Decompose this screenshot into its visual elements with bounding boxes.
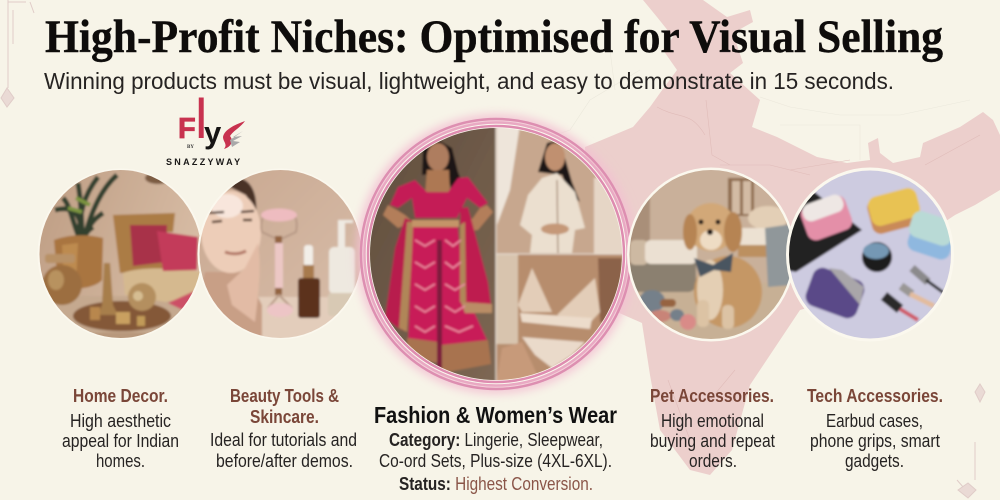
- logo: Fly by Snazzyway: [166, 87, 245, 167]
- label block: fashion and women's wear: [374, 402, 617, 494]
- label block: home decor: appeal for Indian: [62, 431, 179, 451]
- label block: home decor: homes.: [96, 451, 145, 471]
- ring glow: [362, 120, 630, 388]
- photo circle: beauty tools and skincare: [198, 170, 360, 338]
- label block: tech accessories: gadgets.: [845, 451, 904, 471]
- top right panel: satin sleepwear: [496, 125, 626, 255]
- photo circle: pet accessories: [625, 165, 800, 345]
- logo: Fly by Snazzyway: y: [204, 115, 222, 150]
- logo: Fly by Snazzyway: BY: [187, 145, 194, 150]
- logo: Fly by Snazzyway: SNAZZYWAY: [166, 157, 242, 167]
- label block: pet accessories: buying and repeat: [650, 431, 775, 451]
- highlighted photo circle: fashion and women's wear: [361, 119, 631, 389]
- label block: beauty tools and skincare: before/after demos.: [216, 451, 353, 471]
- label block: beauty tools and skincare: Skincare.: [250, 407, 319, 427]
- logo wing: [223, 121, 245, 149]
- label block: tech accessories: Earbud cases,: [826, 411, 923, 431]
- subtitle: Winning products must be visual, lightweight, and easy to demonstrate in 15 seconds.: [44, 68, 894, 94]
- pink ring: [361, 119, 631, 389]
- label block: home decor: High aesthetic: [70, 411, 171, 431]
- logo: Fly by Snazzyway: F: [178, 113, 196, 145]
- label block: tech accessories: Tech Accessories.: [807, 386, 943, 406]
- label block: beauty tools and skincare: [210, 386, 357, 471]
- label block: fashion and women's wear: Status: Highest Conversion.: [399, 474, 593, 494]
- photo circle: tech accessories: [786, 168, 951, 338]
- title: High-Profit Niches: Optimised for Visual Selling: [45, 11, 943, 63]
- photo circle: home decor: [40, 170, 200, 338]
- label block: pet accessories: orders.: [689, 451, 737, 471]
- label block: pet accessories: Pet Accessories.: [650, 386, 774, 406]
- label block: home decor: Home Decor.: [73, 386, 168, 406]
- label block: beauty tools and skincare: Ideal for tutorials and: [210, 430, 357, 450]
- label block: beauty tools and skincare: Beauty Tools &: [230, 386, 339, 406]
- logo: Fly by Snazzyway: l: [195, 87, 207, 150]
- corner ornament: top left: [1, 0, 34, 107]
- left panel: plus-size lehenga: [365, 125, 496, 385]
- label block: tech accessories: [807, 386, 943, 471]
- corner ornament: bottom right: [957, 384, 985, 498]
- label block: pet accessories: [650, 386, 775, 471]
- label block: fashion and women's wear: Fashion & Women’s Wear: [374, 402, 617, 428]
- label block: fashion and women's wear: Category: Lingerie, Sleepwear,: [389, 430, 603, 450]
- label block: tech accessories: phone grips, smart: [810, 431, 940, 451]
- label block: fashion and women's wear: Co-ord Sets, Plus-size (4XL-6XL).: [379, 451, 612, 471]
- bottom right panel: lingerie: [496, 254, 626, 385]
- india map backdrop: [540, 0, 1000, 475]
- label block: pet accessories: High emotional: [661, 411, 764, 431]
- label block: home decor: [62, 386, 179, 471]
